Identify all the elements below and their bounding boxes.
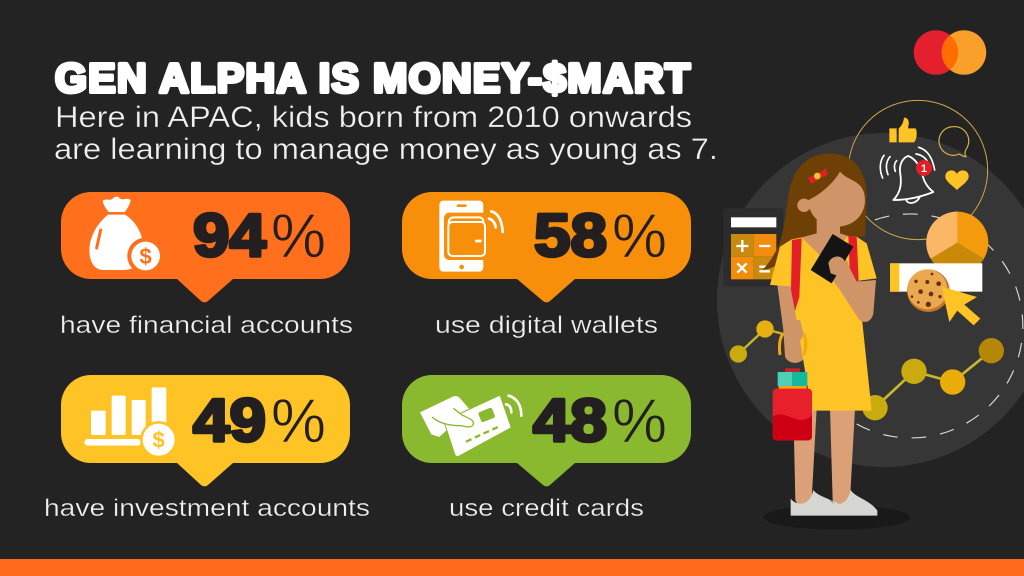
pie chart <box>926 212 988 274</box>
icon: cookie <box>907 269 950 312</box>
logo <box>914 30 986 75</box>
panel: investment accounts <box>61 375 350 486</box>
panel: financial accounts <box>61 192 350 302</box>
label: financial accounts: have financial accounts <box>60 312 353 339</box>
title: GEN ALPHA IS MONEY-$MART <box>55 55 690 101</box>
bag <box>773 320 812 440</box>
icon: card and hand <box>420 395 521 457</box>
stat: 48 percent <box>533 387 667 456</box>
icon: calculator <box>723 208 783 287</box>
hand on phone <box>828 256 847 276</box>
icon: phone wallet <box>439 201 503 272</box>
outline circle <box>848 100 988 240</box>
footer band <box>0 559 1024 576</box>
dashed orbit <box>857 214 1023 438</box>
stat: 58 percent: % <box>612 202 667 271</box>
straps <box>791 236 859 311</box>
line chart right <box>862 338 1004 420</box>
subtitle: Here in APAC, kids born from 2010 onwards <box>55 101 692 134</box>
shadow <box>764 505 910 530</box>
panel: digital wallets <box>402 192 691 302</box>
girl <box>763 153 910 530</box>
stat: 48 percent: % <box>612 387 667 456</box>
arm right <box>827 256 876 322</box>
icon: money bag <box>89 197 164 274</box>
stat: 49 percent: 49 <box>193 387 266 454</box>
stat: 94 percent: % <box>271 202 326 271</box>
icon: bars and coin <box>84 387 177 458</box>
stat: 94 percent <box>193 202 326 271</box>
label: digital wallets: use digital wallets <box>435 312 658 339</box>
icon: money bag: $ <box>140 244 152 269</box>
icon: thumbs up <box>889 118 917 142</box>
neck <box>802 220 848 259</box>
stat: 48 percent: 48 <box>533 387 607 454</box>
icon: heart <box>945 170 969 190</box>
label: credit cards: use credit cards <box>449 495 644 522</box>
hair bow <box>808 168 827 184</box>
label: investment accounts: have investment accounts <box>44 495 370 522</box>
stat: 58 percent <box>534 202 667 271</box>
icon: speech bubble <box>939 127 969 157</box>
subtitle <box>54 101 718 166</box>
stat: 58 percent: 58 <box>534 202 607 269</box>
subtitle: are learning to manage money as young as 7. <box>54 133 718 166</box>
icon: bell: 1 <box>921 163 927 175</box>
icon: bars and coin: $ <box>153 428 165 453</box>
icon: bell <box>880 147 935 203</box>
phone <box>811 234 853 283</box>
stat: 49 percent <box>193 387 326 456</box>
icon: cursor <box>942 287 980 325</box>
line chart left <box>730 320 783 363</box>
white banner <box>890 263 982 292</box>
shoes <box>791 490 877 516</box>
head <box>808 172 865 227</box>
dress <box>770 236 877 411</box>
stat: 94 percent: 94 <box>193 202 267 269</box>
panel: credit cards <box>402 375 691 486</box>
illustration: girl with money icons <box>717 100 1024 530</box>
arm left <box>777 285 805 363</box>
stat: 49 percent: % <box>271 387 326 456</box>
ear <box>797 199 811 212</box>
legs <box>793 408 855 505</box>
hair <box>763 153 867 270</box>
background circle <box>717 133 1024 467</box>
